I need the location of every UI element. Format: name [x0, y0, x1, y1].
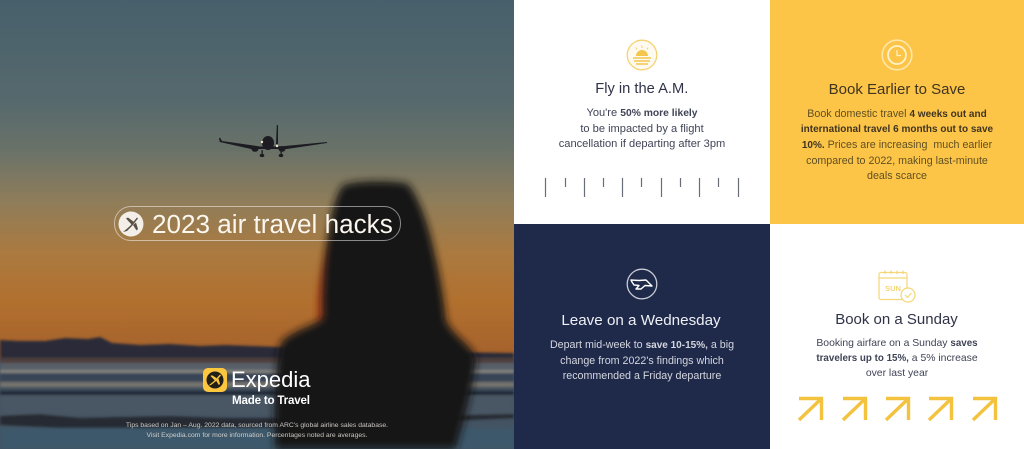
footnote: Visit Expedia.com for more information. Percentages noted are averages.	[147, 432, 367, 438]
body text: cancellation if departing after 3pm	[559, 138, 725, 150]
title text: 2023 air travel hacks	[152, 208, 393, 238]
body text: 10%. Prices are increasing much earlier	[802, 139, 992, 151]
photo background: sky, mountains, sea and silhouette	[0, 0, 514, 449]
body text: over last year	[866, 368, 928, 379]
tagline: Made to Travel	[232, 394, 310, 406]
body text: deals scarce	[867, 170, 927, 182]
body text	[816, 338, 978, 379]
body text: Booking airfare on a Sunday saves	[816, 338, 978, 349]
icon: clock	[881, 39, 913, 71]
heading: Book Earlier to Save	[829, 81, 965, 98]
icon: plane in white circle	[118, 212, 144, 236]
heading: Book on a Sunday	[835, 311, 958, 328]
icon: Expedia yellow square	[203, 368, 227, 392]
body text: Depart mid-week to save 10-15%, a big	[550, 339, 734, 351]
panel: Leave on a Wednesday	[514, 224, 770, 449]
footnote	[126, 422, 388, 438]
wordmark: Expedia	[231, 367, 311, 392]
icon: sunrise	[626, 40, 658, 70]
panel: sunset photo with plane	[0, 0, 514, 449]
body text	[801, 108, 993, 182]
icon: plane in circle	[626, 268, 658, 300]
title pill: 2023 air travel hacks	[114, 206, 401, 241]
footnote: Tips based on Jan – Aug. 2022 data, sourced from ARC's global airline sales database.	[126, 422, 388, 429]
body text: compared to 2022, making last-minute	[806, 155, 988, 167]
body text: to be impacted by a flight	[580, 123, 704, 135]
panel: Book on a Sunday	[770, 224, 1024, 449]
body text: Book domestic travel 4 weeks out and	[807, 108, 987, 120]
calendar label: SUN	[885, 284, 901, 293]
timeline ticks	[544, 178, 740, 197]
heading: Fly in the A.M.	[595, 81, 688, 97]
Expedia logo	[203, 367, 311, 406]
body text: change from 2022's findings which	[560, 355, 724, 367]
body text: You're 50% more likely	[586, 107, 698, 119]
arrows row	[798, 396, 998, 422]
heading: Leave on a Wednesday	[561, 312, 721, 329]
panel: Fly in the A.M.	[514, 0, 770, 224]
body text	[559, 107, 725, 150]
body text: travelers up to 15%, a 5% increase	[816, 353, 978, 364]
body text: international travel 6 months out to save	[801, 124, 993, 135]
body text: recommended a Friday departure	[563, 370, 721, 382]
body text	[550, 339, 734, 382]
icon: calendar	[878, 270, 916, 303]
panel: Book Earlier to Save	[770, 0, 1024, 224]
plane silhouette	[219, 125, 327, 158]
